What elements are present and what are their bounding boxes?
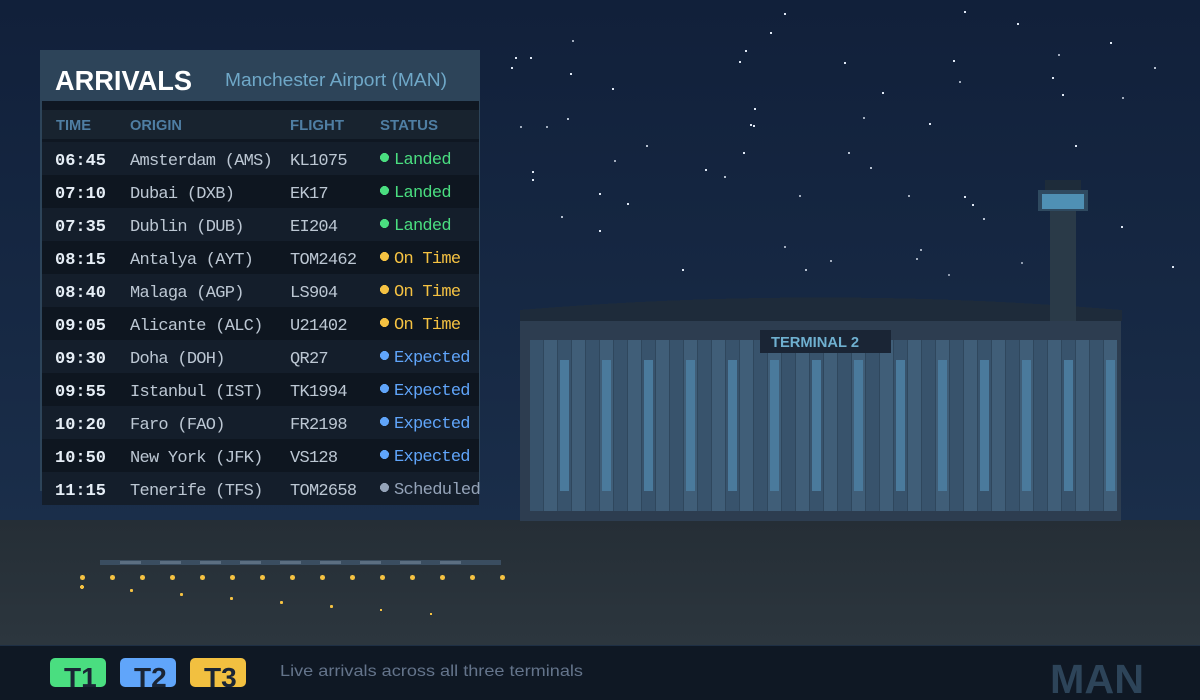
row: VS128: VS128: [290, 449, 338, 468]
row: KL1075: Amsterdam (AMS): [130, 152, 272, 171]
badge: T1: [50, 658, 106, 687]
row: FR2198: Expected: [394, 415, 470, 434]
row: EI204: EI204: [290, 218, 338, 237]
row: EI204: 07:35: [55, 218, 106, 237]
row: EK17: 07:10: [55, 185, 106, 204]
row: EI204: [42, 208, 479, 241]
row: KL1075: KL1075: [290, 152, 347, 171]
row: TK1994: [42, 373, 479, 406]
row: EI204: Dublin (DUB): [130, 218, 244, 237]
column headers: ORIGIN: [130, 117, 182, 134]
facade windows: [560, 360, 1115, 491]
row: VS128: New York (JFK): [130, 449, 263, 468]
row: EK17: Landed: [394, 184, 451, 203]
night sky background: [0, 0, 1200, 530]
row: TOM2462: Antalya (AYT): [130, 251, 253, 270]
stars: [511, 11, 1174, 276]
row: QR27: [42, 340, 479, 373]
badge: T3: [190, 658, 246, 687]
row: U21402: [42, 307, 479, 340]
control tower: [1038, 180, 1088, 322]
row: VS128: Expected: [394, 448, 470, 467]
row: KL1075: [42, 142, 479, 175]
runway: [100, 560, 501, 565]
row: EK17: EK17: [290, 185, 328, 204]
row: TOM2462: On Time: [394, 250, 461, 269]
row: VS128: [42, 439, 479, 472]
row: TOM2462: [42, 241, 479, 274]
row: TK1994: TK1994: [290, 383, 347, 402]
row: TK1994: Istanbul (IST): [130, 383, 263, 402]
row: U21402: U21402: [290, 317, 347, 336]
row: LS904: [42, 274, 479, 307]
column headers: TIME: [56, 117, 91, 134]
footer bar: [0, 645, 1200, 694]
row: FR2198: Faro (FAO): [130, 416, 225, 435]
terminal building: [520, 298, 1122, 521]
column headers: [42, 110, 479, 139]
column headers: FLIGHT: [290, 117, 344, 134]
row: U21402: On Time: [394, 316, 461, 335]
row: KL1075: Landed: [394, 151, 451, 170]
footer caption: Live arrivals across all three terminals: [280, 663, 583, 680]
row: TOM2658: Tenerife (TFS): [130, 482, 263, 501]
row: TOM2462: 08:15: [55, 251, 106, 270]
terminal sign: [760, 330, 891, 353]
facade panels: [530, 340, 1117, 511]
row: U21402: 09:05: [55, 317, 106, 336]
row: VS128: 10:50: [55, 449, 106, 468]
row: QR27: Doha (DOH): [130, 350, 225, 369]
runway lights: [80, 575, 505, 615]
badge: T3: T3: [204, 662, 237, 693]
badge: T1: T1: [64, 662, 97, 693]
row: TOM2462: TOM2462: [290, 251, 356, 270]
row: FR2198: FR2198: [290, 416, 347, 435]
board title: ARRIVALS: [55, 65, 192, 96]
column headers: STATUS: [380, 117, 438, 134]
badge: T2: [120, 658, 176, 687]
row: QR27: QR27: [290, 350, 328, 369]
row: TOM2658: 11:15: [55, 482, 106, 501]
row: LS904: 08:40: [55, 284, 106, 303]
row: TK1994: 09:55: [55, 383, 106, 402]
row: EI204: Landed: [394, 217, 451, 236]
terminal sign: TERMINAL 2: [771, 334, 859, 351]
arrivals board: [40, 50, 480, 505]
row: QR27: Expected: [394, 349, 470, 368]
row: LS904: LS904: [290, 284, 338, 303]
row: QR27: 09:30: [55, 350, 106, 369]
badge: T2: T2: [134, 662, 167, 693]
row: EK17: [42, 175, 479, 208]
row: KL1075: 06:45: [55, 152, 106, 171]
row: TOM2658: Scheduled: [394, 481, 480, 500]
board subtitle: Manchester Airport (MAN): [225, 70, 447, 90]
row: TOM2658: [42, 472, 480, 505]
row: U21402: Alicante (ALC): [130, 317, 263, 336]
row: LS904: Malaga (AGP): [130, 284, 244, 303]
row: LS904: On Time: [394, 283, 461, 302]
row: FR2198: [42, 406, 479, 439]
row: TOM2658: TOM2658: [290, 482, 357, 501]
row: EK17: Dubai (DXB): [130, 185, 234, 204]
row: TK1994: Expected: [394, 382, 470, 401]
apron ground: [0, 520, 1200, 646]
row: FR2198: 10:20: [55, 416, 106, 435]
